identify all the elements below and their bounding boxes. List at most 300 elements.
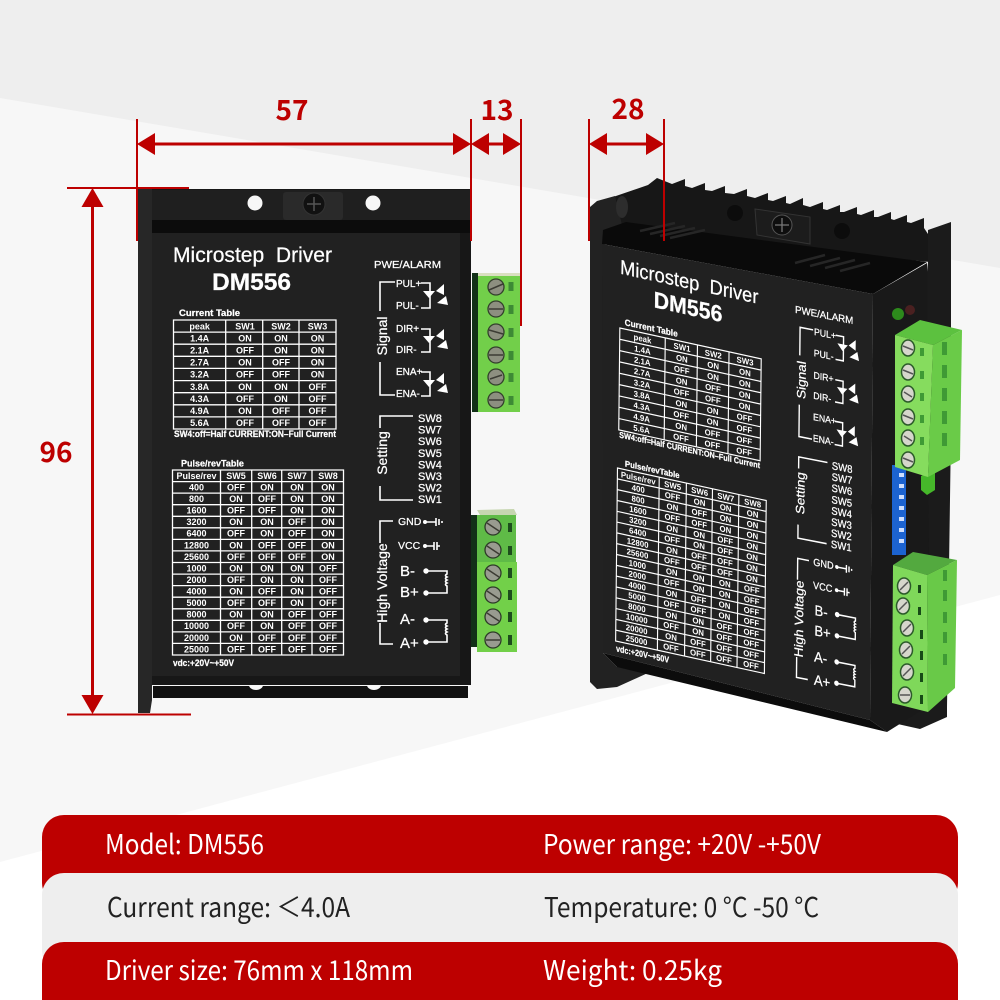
pulse per revolution table: ON bbox=[229, 586, 243, 596]
pulse per revolution table: OFF bbox=[716, 653, 732, 666]
terminal labels and wiring symbols: SW5 bbox=[831, 495, 852, 510]
pulse per revolution table: OFF bbox=[692, 507, 707, 520]
pulse per revolution table: OFF bbox=[288, 621, 306, 631]
pulse per revolution table: ON bbox=[666, 588, 677, 600]
pulse per revolution table: ON bbox=[321, 529, 335, 539]
pulse per revolution table: OFF bbox=[663, 642, 679, 654]
terminal labels and wiring symbols: GND bbox=[398, 516, 422, 528]
pulse per revolution table: ON bbox=[747, 519, 758, 531]
pulse per revolution table: ON bbox=[665, 610, 677, 622]
terminal labels and wiring symbols: ENA+ bbox=[813, 412, 836, 427]
current table: SW4:off=Half CURRENT:ON–Full Current bbox=[174, 429, 336, 439]
pulse per revolution table: ON bbox=[719, 589, 731, 601]
pulse per revolution table: ON bbox=[746, 541, 758, 553]
pulse per revolution table: OFF bbox=[319, 575, 337, 585]
pulse per revolution table: 25000 bbox=[184, 644, 209, 654]
current table: 3.8A bbox=[190, 382, 210, 392]
pulse per revolution table: OFF bbox=[691, 594, 706, 606]
current table: 2.7A bbox=[190, 358, 210, 368]
current table: ON bbox=[238, 382, 252, 392]
pulse per revolution table: ON bbox=[290, 598, 304, 608]
pulse per revolution table: 25600 bbox=[184, 552, 209, 562]
pulse per revolution table: ON bbox=[693, 529, 705, 541]
pulse per revolution table: ON bbox=[290, 586, 304, 596]
pulse per revolution table: ON bbox=[694, 497, 705, 508]
pulse per revolution table: OFF bbox=[258, 644, 276, 654]
current table: OFF bbox=[272, 358, 290, 368]
current table: ON bbox=[707, 405, 719, 417]
pulse per revolution table: 1000 bbox=[186, 563, 207, 573]
pulse per revolution table: OFF bbox=[288, 517, 306, 527]
pulse per revolution table: OFF bbox=[664, 512, 680, 525]
pulse per revolution table: 12800 bbox=[627, 536, 649, 550]
pulse per revolution table: ON bbox=[746, 562, 758, 574]
upper green terminal block bbox=[472, 273, 520, 412]
pulse per revolution table: 8000 bbox=[628, 602, 646, 615]
pulse per revolution table: ON bbox=[667, 502, 678, 513]
pulse per revolution table: Pulse/revTable bbox=[625, 459, 680, 480]
pulse per revolution table: SW8 bbox=[318, 471, 338, 481]
spec row: current range and temperature: Temperature: 0 °C -50 °C bbox=[544, 886, 819, 925]
dimension: height 96: 96 bbox=[39, 431, 73, 471]
current table: ON bbox=[675, 398, 687, 410]
current table: Current Table bbox=[625, 317, 678, 339]
pulse per revolution table: ON bbox=[229, 494, 243, 504]
pulse per revolution table: OFF bbox=[690, 648, 706, 660]
current table: peak bbox=[189, 321, 211, 331]
terminal labels and wiring symbols: SW6 bbox=[831, 483, 853, 499]
pulse per revolution table: OFF bbox=[227, 482, 245, 492]
pulse per revolution table: OFF bbox=[258, 552, 276, 562]
pulse per revolution table: 20000 bbox=[626, 623, 648, 637]
terminal labels and wiring symbols: SW7 bbox=[418, 424, 442, 436]
spec row: driver size and weight: Driver size: 76mm x 118mm bbox=[105, 949, 413, 988]
right driver angled view bbox=[590, 178, 962, 732]
current table: ON bbox=[311, 358, 324, 368]
pulse per revolution table: ON bbox=[321, 540, 335, 550]
pulse per revolution table: ON bbox=[290, 494, 304, 504]
terminal labels and wiring symbols: ENA+ bbox=[396, 367, 423, 378]
lower angled terminal block bbox=[892, 552, 957, 712]
pulse per revolution table: OFF bbox=[227, 552, 245, 562]
pulse per revolution table: ON bbox=[666, 566, 678, 578]
pulse per revolution table: OFF bbox=[690, 637, 706, 649]
pulse per revolution table: OFF bbox=[319, 633, 337, 643]
pulse per revolution table: OFF bbox=[319, 598, 337, 608]
pulse per revolution table: ON bbox=[719, 610, 730, 622]
terminal labels and wiring symbols: DIR- bbox=[813, 390, 831, 404]
terminal labels and wiring symbols: ENA- bbox=[396, 389, 420, 400]
pulse per revolution table: 5000 bbox=[628, 591, 646, 604]
terminal labels and wiring symbols: SW1 bbox=[418, 494, 442, 506]
product title bbox=[173, 243, 332, 296]
current table: OFF bbox=[308, 406, 327, 416]
pulse per revolution table: ON bbox=[720, 502, 732, 514]
current table: SW4:off=Half CURRENT:ON–Full Current bbox=[619, 430, 760, 470]
current table: 4.9A bbox=[633, 412, 650, 425]
terminal labels and wiring symbols: VCC bbox=[813, 580, 832, 595]
current table: OFF bbox=[308, 382, 327, 392]
current table: OFF bbox=[736, 446, 752, 458]
pulse per revolution table bbox=[172, 458, 344, 669]
upper angled terminal block bbox=[895, 320, 962, 495]
current table bbox=[174, 308, 336, 439]
terminal labels and wiring symbols: High Voltage bbox=[792, 579, 806, 658]
pulse per revolution table: ON bbox=[321, 552, 335, 562]
current table: ON bbox=[274, 333, 288, 343]
pulse per revolution table: ON bbox=[229, 540, 243, 550]
pulse per revolution table: OFF bbox=[744, 584, 760, 596]
pulse per revolution table: OFF bbox=[716, 621, 732, 634]
terminal labels and wiring symbols: A- bbox=[814, 648, 828, 667]
current table: OFF bbox=[705, 393, 721, 406]
pulse per revolution table: OFF bbox=[664, 577, 679, 590]
current table: OFF bbox=[272, 370, 290, 380]
terminal labels and wiring symbols: B- bbox=[400, 563, 415, 580]
pulse per revolution table: 1600 bbox=[186, 506, 207, 516]
pulse per revolution table: OFF bbox=[227, 621, 245, 631]
pulse per revolution table: OFF bbox=[716, 643, 732, 655]
spec row: current range and temperature: Current range: ＜4.0A bbox=[107, 886, 351, 925]
current table: ON bbox=[707, 417, 719, 428]
current table: OFF bbox=[236, 394, 254, 404]
pulse per revolution table: OFF bbox=[227, 529, 245, 539]
pulse per revolution table: 800 bbox=[189, 494, 204, 504]
pulse per revolution table: OFF bbox=[717, 534, 733, 547]
current table: SW2 bbox=[271, 321, 291, 331]
terminal labels and wiring symbols: Setting bbox=[793, 471, 807, 515]
pulse per revolution table: OFF bbox=[691, 550, 707, 563]
current table: ON bbox=[707, 360, 719, 372]
spec row: model and power range bbox=[42, 815, 958, 905]
pulse per revolution table: OFF bbox=[743, 659, 759, 672]
pulse per revolution table: 400 bbox=[189, 482, 204, 492]
current table: OFF bbox=[705, 382, 721, 395]
pulse per revolution table: OFF bbox=[690, 604, 706, 617]
pulse per revolution table: 800 bbox=[631, 494, 645, 506]
pulse per revolution table: 4000 bbox=[186, 586, 207, 596]
pulse per revolution table: ON bbox=[229, 633, 243, 643]
pulse per revolution table: OFF bbox=[716, 632, 732, 644]
current table: ON bbox=[739, 378, 751, 390]
current table: OFF bbox=[308, 418, 327, 428]
pulse per revolution table: 400 bbox=[632, 483, 645, 495]
pulse per revolution table: Pulse/rev bbox=[621, 470, 656, 487]
current table: OFF bbox=[737, 412, 752, 424]
pulse per revolution table: SW7 bbox=[717, 491, 735, 504]
current table: OFF bbox=[736, 423, 752, 436]
pulse per revolution table: OFF bbox=[691, 561, 707, 574]
current table: ON bbox=[311, 370, 324, 380]
pulse per revolution table: OFF bbox=[258, 540, 276, 550]
pulse per revolution table: Pulse/revTable bbox=[181, 458, 244, 468]
pulse per revolution table: 1000 bbox=[629, 558, 647, 571]
pulse per revolution table: OFF bbox=[319, 644, 337, 654]
current table: 3.2A bbox=[190, 370, 210, 380]
pulse per revolution table: SW5 bbox=[664, 479, 682, 492]
terminal labels and wiring symbols: High Voltage bbox=[374, 543, 390, 623]
pulse per revolution table: OFF bbox=[227, 506, 245, 516]
pulse per revolution table: OFF bbox=[288, 610, 306, 620]
current table: 1.4A bbox=[190, 333, 210, 343]
terminal labels and wiring symbols: PUL+ bbox=[814, 327, 836, 341]
pulse per revolution table: 20000 bbox=[184, 633, 209, 643]
current table: 4.3A bbox=[190, 394, 210, 404]
current table: ON bbox=[676, 376, 688, 388]
lower green terminal block bbox=[471, 509, 517, 652]
terminal labels and wiring symbols: PWE/ALARM bbox=[374, 259, 441, 271]
terminal labels and wiring symbols: SW4 bbox=[418, 460, 442, 472]
current table: ON bbox=[707, 371, 719, 383]
terminal labels and wiring symbols: SW3 bbox=[418, 471, 442, 483]
terminal labels and wiring symbols: SW1 bbox=[831, 539, 852, 555]
pulse per revolution table: ON bbox=[290, 575, 304, 585]
current table: OFF bbox=[673, 409, 689, 422]
current table: SW2 bbox=[705, 348, 722, 361]
terminal labels and wiring symbols: A- bbox=[400, 611, 415, 628]
pulse per revolution table: 2000 bbox=[629, 569, 646, 582]
current table: peak bbox=[634, 333, 652, 346]
current table: ON bbox=[238, 358, 252, 368]
pulse per revolution table: OFF bbox=[664, 598, 679, 611]
pulse per revolution table: OFF bbox=[663, 620, 679, 633]
terminal labels and wiring symbols: PUL+ bbox=[396, 279, 421, 290]
pulse per revolution table: OFF bbox=[227, 575, 245, 585]
pulse per revolution table: ON bbox=[719, 578, 731, 590]
pulse per revolution table: SW6 bbox=[691, 485, 709, 498]
current table: 4.3A bbox=[633, 401, 650, 413]
pulse per revolution table: ON bbox=[719, 600, 731, 611]
terminal labels and wiring symbols: Signal bbox=[794, 360, 809, 400]
current table: SW1 bbox=[235, 321, 255, 331]
terminal labels and wiring symbols: B- bbox=[815, 601, 828, 621]
pulse per revolution table: 10000 bbox=[626, 612, 648, 626]
pulse per revolution table: SW5 bbox=[226, 471, 246, 481]
pulse per revolution table: ON bbox=[260, 563, 274, 573]
terminal labels and wiring symbols: SW2 bbox=[418, 482, 442, 494]
pulse per revolution table: ON bbox=[692, 616, 704, 627]
current table: ON bbox=[675, 421, 687, 433]
pulse per revolution table: OFF bbox=[288, 633, 306, 643]
pulse per revolution table: ON bbox=[321, 506, 335, 516]
pulse per revolution table: OFF bbox=[258, 494, 276, 504]
pulse per revolution table: ON bbox=[747, 508, 759, 520]
terminal labels and wiring symbols: PUL- bbox=[396, 301, 419, 312]
pulse per revolution table: 1600 bbox=[629, 504, 647, 517]
pulse per revolution table: OFF bbox=[744, 605, 759, 618]
terminal labels and wiring symbols: SW2 bbox=[831, 528, 852, 544]
current table: OFF bbox=[704, 439, 720, 451]
current table: ON bbox=[311, 333, 324, 343]
dimension: terminal depth 13: 13 bbox=[480, 89, 514, 129]
terminal labels and wiring symbols: SW8 bbox=[832, 461, 853, 476]
spec row: current range and temperature bbox=[42, 873, 958, 973]
pulse per revolution table: vdc:+20V~+50V bbox=[173, 658, 235, 669]
pulse per revolution table: OFF bbox=[288, 540, 306, 550]
pulse per revolution table: ON bbox=[260, 529, 274, 539]
pulse per revolution table: ON bbox=[260, 610, 274, 620]
terminal labels and wiring symbols: DIR- bbox=[396, 345, 417, 356]
dimension: thickness 28: 28 bbox=[611, 88, 645, 128]
terminal labels and wiring symbols: ENA- bbox=[813, 433, 834, 447]
terminal labels and wiring symbols bbox=[791, 304, 859, 696]
pulse per revolution table: OFF bbox=[717, 556, 733, 569]
blue DIP switch bbox=[892, 465, 906, 555]
pulse per revolution table: ON bbox=[666, 523, 678, 535]
terminal labels and wiring symbols: DIR+ bbox=[396, 324, 419, 335]
current table: ON bbox=[739, 390, 751, 401]
pulse per revolution table: 6400 bbox=[186, 529, 207, 539]
product title bbox=[620, 256, 759, 335]
product title: Microstep Driver bbox=[620, 256, 759, 309]
pulse per revolution table: 8000 bbox=[186, 610, 207, 620]
left driver front view bbox=[138, 189, 520, 713]
pulse per revolution table: ON bbox=[260, 482, 274, 492]
pulse per revolution table: 5000 bbox=[186, 598, 207, 608]
heat sink and case bbox=[590, 178, 951, 732]
terminal labels and wiring symbols: SW7 bbox=[832, 472, 853, 487]
terminal labels and wiring symbols: GND bbox=[813, 557, 834, 572]
pulse per revolution table: OFF bbox=[288, 529, 306, 539]
pulse per revolution table: ON bbox=[321, 517, 335, 527]
pulse per revolution table: ON bbox=[719, 524, 731, 536]
pulse per revolution table: SW8 bbox=[744, 497, 762, 510]
current table: OFF bbox=[673, 432, 689, 445]
current table: 4.9A bbox=[190, 406, 210, 416]
pulse per revolution table: ON bbox=[746, 551, 758, 563]
terminal labels and wiring symbols: DIR+ bbox=[813, 370, 834, 384]
pulse per revolution table: SW6 bbox=[257, 471, 277, 481]
pulse per revolution table: 10000 bbox=[184, 621, 209, 631]
current table: OFF bbox=[674, 364, 690, 377]
pulse per revolution table: 25000 bbox=[626, 633, 648, 648]
current table: 5.6A bbox=[633, 423, 650, 436]
terminal labels and wiring symbols: SW4 bbox=[831, 506, 852, 521]
pulse per revolution table: OFF bbox=[319, 586, 337, 596]
pulse per revolution table: OFF bbox=[258, 633, 276, 643]
pulse per revolution table: ON bbox=[260, 575, 274, 585]
pulse per revolution table: ON bbox=[693, 540, 705, 552]
pulse per revolution table: OFF bbox=[664, 555, 680, 568]
pulse per revolution table: OFF bbox=[227, 598, 245, 608]
current table: OFF bbox=[272, 406, 290, 416]
pulse per revolution table: 2000 bbox=[186, 575, 207, 585]
pulse per revolution table: OFF bbox=[258, 598, 276, 608]
current table: OFF bbox=[236, 346, 254, 356]
spec row: model and power range: Power range: +20V -+50V bbox=[543, 823, 821, 862]
product title: Microstep Driver bbox=[173, 243, 332, 267]
current table: 2.1A bbox=[634, 355, 651, 368]
terminal labels and wiring symbols: A+ bbox=[814, 671, 830, 691]
pulse per revolution table: ON bbox=[746, 573, 758, 585]
current table: 1.4A bbox=[634, 344, 651, 357]
current table: ON bbox=[676, 353, 688, 365]
pulse per revolution table: OFF bbox=[743, 648, 759, 661]
pulse per revolution table: 4000 bbox=[628, 580, 646, 593]
dimension: terminal depth 13 bbox=[471, 89, 521, 326]
pulse per revolution table: ON bbox=[720, 513, 731, 525]
pulse per revolution table: vdc:+20V~+50V bbox=[616, 643, 669, 665]
dimension: width 57 bbox=[137, 89, 471, 241]
pulse per revolution table: OFF bbox=[664, 534, 680, 546]
terminal labels and wiring symbols: B+ bbox=[400, 584, 419, 601]
dimension: height 96 bbox=[39, 188, 191, 714]
pulse per revolution table: OFF bbox=[717, 567, 733, 579]
pulse per revolution table: ON bbox=[666, 545, 678, 557]
pulse per revolution table: ON bbox=[290, 563, 304, 573]
current table: ON bbox=[311, 346, 324, 356]
pulse per revolution table: OFF bbox=[288, 644, 306, 654]
current table: OFF bbox=[736, 434, 752, 447]
current table: OFF bbox=[236, 370, 254, 380]
pulse per revolution table: ON bbox=[290, 506, 304, 516]
pulse per revolution table bbox=[615, 458, 766, 686]
pulse per revolution table: ON bbox=[692, 626, 704, 638]
terminal labels and wiring symbols: SW8 bbox=[418, 413, 442, 425]
current table: 2.1A bbox=[190, 346, 210, 356]
current table: Current Table bbox=[179, 308, 240, 319]
current table: 2.7A bbox=[634, 367, 651, 379]
pulse per revolution table: ON bbox=[260, 517, 274, 527]
pulse per revolution table: OFF bbox=[319, 610, 337, 620]
pulse per revolution table: OFF bbox=[319, 563, 337, 573]
pulse per revolution table: SW7 bbox=[287, 471, 307, 481]
pulse per revolution table: OFF bbox=[743, 638, 759, 650]
pulse per revolution table: ON bbox=[260, 621, 274, 631]
pulse per revolution table: ON bbox=[665, 631, 677, 643]
dimension: width 57: 57 bbox=[275, 89, 309, 129]
pulse per revolution table: OFF bbox=[288, 552, 306, 562]
current table: OFF bbox=[705, 427, 720, 440]
pulse per revolution table: OFF bbox=[691, 518, 707, 531]
terminal labels and wiring symbols bbox=[374, 259, 448, 652]
pulse per revolution table: 12800 bbox=[184, 540, 209, 550]
pulse per revolution table: OFF bbox=[227, 644, 245, 654]
pulse per revolution table: ON bbox=[321, 494, 335, 504]
current table: ON bbox=[274, 394, 288, 404]
current table bbox=[619, 316, 762, 470]
current table: SW3 bbox=[308, 321, 327, 331]
pulse per revolution table: OFF bbox=[319, 621, 337, 631]
pulse per revolution table: ON bbox=[693, 583, 705, 595]
spec row: driver size and weight: Weight: 0.25kg bbox=[543, 949, 722, 988]
pulse per revolution table: ON bbox=[321, 482, 335, 492]
current table: ON bbox=[274, 382, 288, 392]
pulse per revolution table: OFF bbox=[717, 545, 733, 558]
pulse per revolution table: OFF bbox=[744, 616, 759, 629]
terminal labels and wiring symbols: PWE/ALARM bbox=[795, 304, 853, 327]
spec row: model and power range: Model: DM556 bbox=[105, 823, 264, 862]
current table: 5.6A bbox=[190, 418, 210, 428]
pulse per revolution table: 25600 bbox=[627, 547, 649, 561]
current table: OFF bbox=[272, 418, 290, 428]
product title: DM556 bbox=[654, 287, 723, 327]
pulse per revolution table: 3200 bbox=[186, 517, 207, 527]
terminal labels and wiring symbols: SW6 bbox=[418, 436, 442, 448]
dimension: thickness 28 bbox=[589, 88, 664, 241]
terminal labels and wiring symbols: VCC bbox=[398, 540, 421, 552]
driver body and heat sink bbox=[138, 189, 471, 713]
current table: OFF bbox=[236, 418, 254, 428]
pulse per revolution table: ON bbox=[693, 572, 705, 584]
product title: DM556 bbox=[212, 269, 291, 296]
terminal labels and wiring symbols: B+ bbox=[814, 622, 831, 642]
terminal labels and wiring symbols: PUL- bbox=[814, 348, 834, 362]
terminal labels and wiring symbols: SW5 bbox=[418, 448, 442, 460]
pulse per revolution table: OFF bbox=[744, 594, 760, 607]
current table: 3.8A bbox=[634, 389, 650, 402]
pulse per revolution table: 3200 bbox=[629, 515, 647, 528]
